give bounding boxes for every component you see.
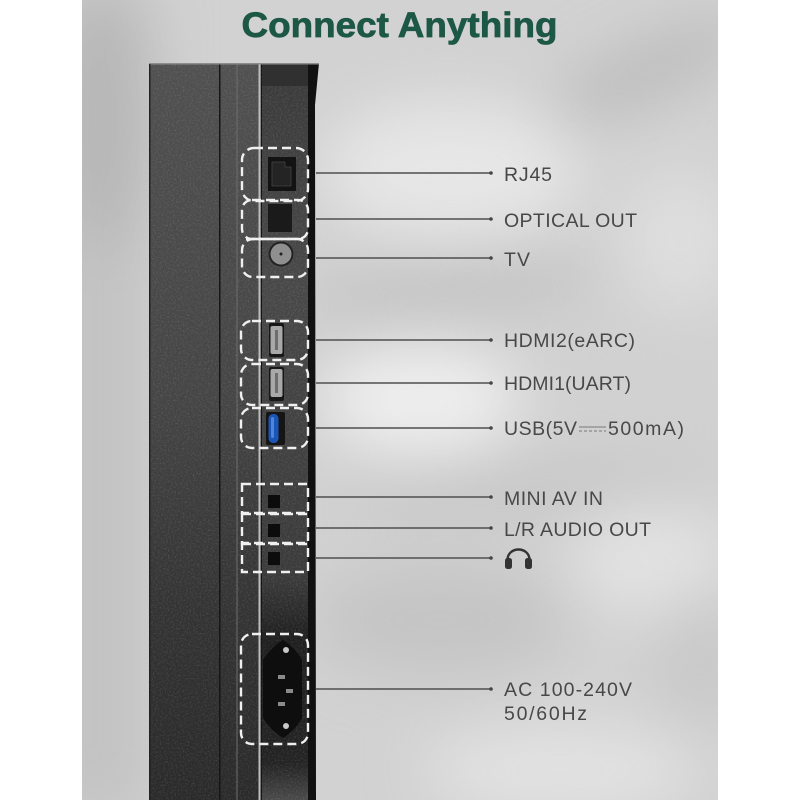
- icon: optical out port: [268, 204, 292, 232]
- icon: AC power inlet: [263, 640, 302, 738]
- icon: headphones: [505, 550, 532, 569]
- label: mini AV in: MINI AV IN: [504, 488, 603, 510]
- icon: mini AV jack: [268, 495, 280, 508]
- icon: headphone jack: [268, 552, 280, 565]
- label: RJ45: RJ45: [504, 164, 552, 186]
- device side panel: [149, 63, 319, 800]
- label: AC power: [504, 679, 632, 725]
- label: HDMI2: HDMI2(eARC): [504, 330, 635, 352]
- icon: USB port: [266, 412, 285, 445]
- icon: RJ45 port: [268, 157, 296, 191]
- background panel: [82, 0, 718, 800]
- label: optical out: OPTICAL OUT: [504, 210, 637, 232]
- label: USB: [504, 418, 684, 440]
- icon: HDMI2 port: [269, 323, 284, 357]
- title: Connect Anything: [242, 6, 558, 45]
- label: TV: TV: [504, 249, 530, 271]
- connector lines: [316, 171, 493, 691]
- callout outlines: [241, 148, 308, 744]
- label: L/R audio out: L/R AUDIO OUT: [504, 519, 651, 541]
- label: HDMI1: HDMI1(UART): [504, 373, 631, 395]
- label: AC power: AC 100-240V: [504, 679, 632, 701]
- label: USB: 500mA): [608, 418, 684, 440]
- icon: HDMI1 port: [269, 367, 284, 401]
- icon: L/R audio jack: [268, 524, 280, 537]
- label: USB: USB(5V: [504, 418, 577, 440]
- label: AC power: 50/60Hz: [504, 703, 587, 725]
- icon: TV coaxial port: [268, 242, 294, 266]
